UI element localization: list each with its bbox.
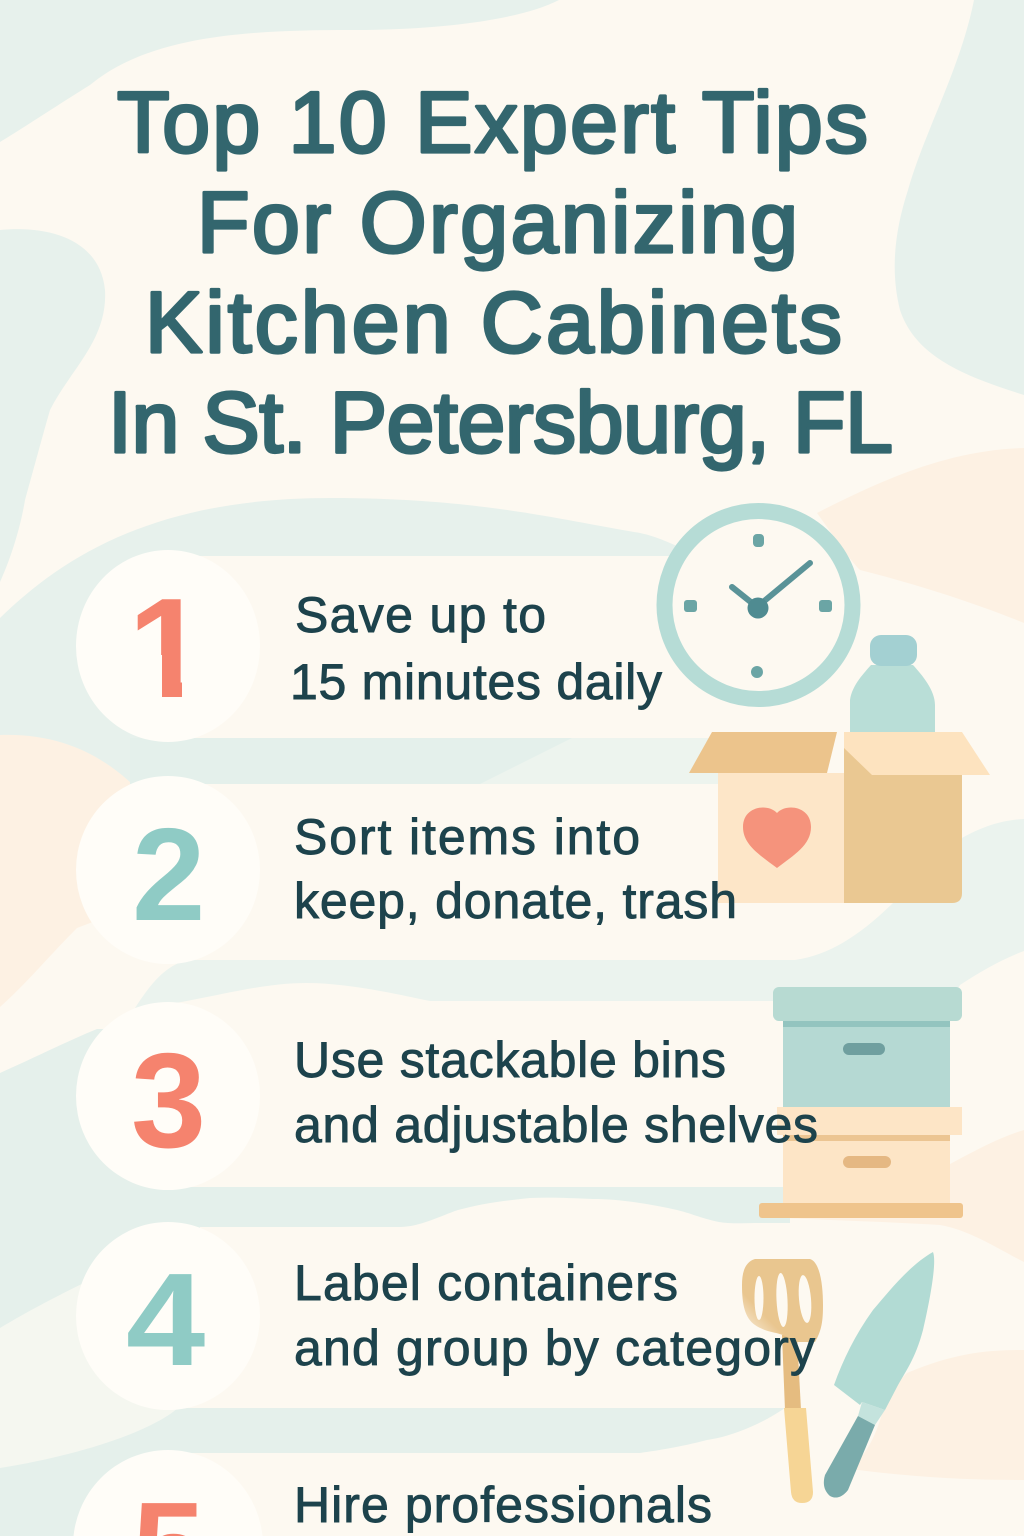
panel: row bands [160,556,760,1536]
tip 2: keep, donate, trash [294,873,737,929]
tip 5 [140,1485,711,1536]
mint bands between rows [0,738,1024,1468]
tip 2: 2 [132,801,205,948]
title: For Organizing [197,175,798,271]
tip 2: Sort items into [294,809,640,865]
panel: number circles [73,550,263,1536]
icon: clock [664,511,852,699]
tip 1: Save up to [295,587,546,643]
icon: donation box [689,732,990,903]
icon: spatula [742,1259,823,1503]
tip 4: Label containers [294,1255,678,1311]
tip 3: 3 [131,1025,206,1176]
tip 3: and adjustable shelves [294,1097,818,1153]
icon: knife [824,1252,934,1498]
tip 4: 4 [126,1247,205,1394]
title: In St. Petersburg, FL [108,375,893,471]
tip 4: and group by category [294,1320,815,1376]
title: Kitchen Cabinets [145,275,842,371]
title: Top 10 Expert Tips [117,75,868,171]
tip 5: Hire professionals [294,1477,712,1533]
tip 3: Use stackable bins [294,1032,726,1088]
icon: bottle [850,635,935,732]
tip 3 [131,1025,818,1176]
tip 2 [132,801,737,948]
icon: stacked bins [759,987,963,1218]
tip 4 [126,1247,815,1394]
tip 1: 1 [128,569,207,728]
title [108,75,893,471]
tip 1: 15 minutes daily [290,654,662,710]
tip 1 [138,596,662,710]
